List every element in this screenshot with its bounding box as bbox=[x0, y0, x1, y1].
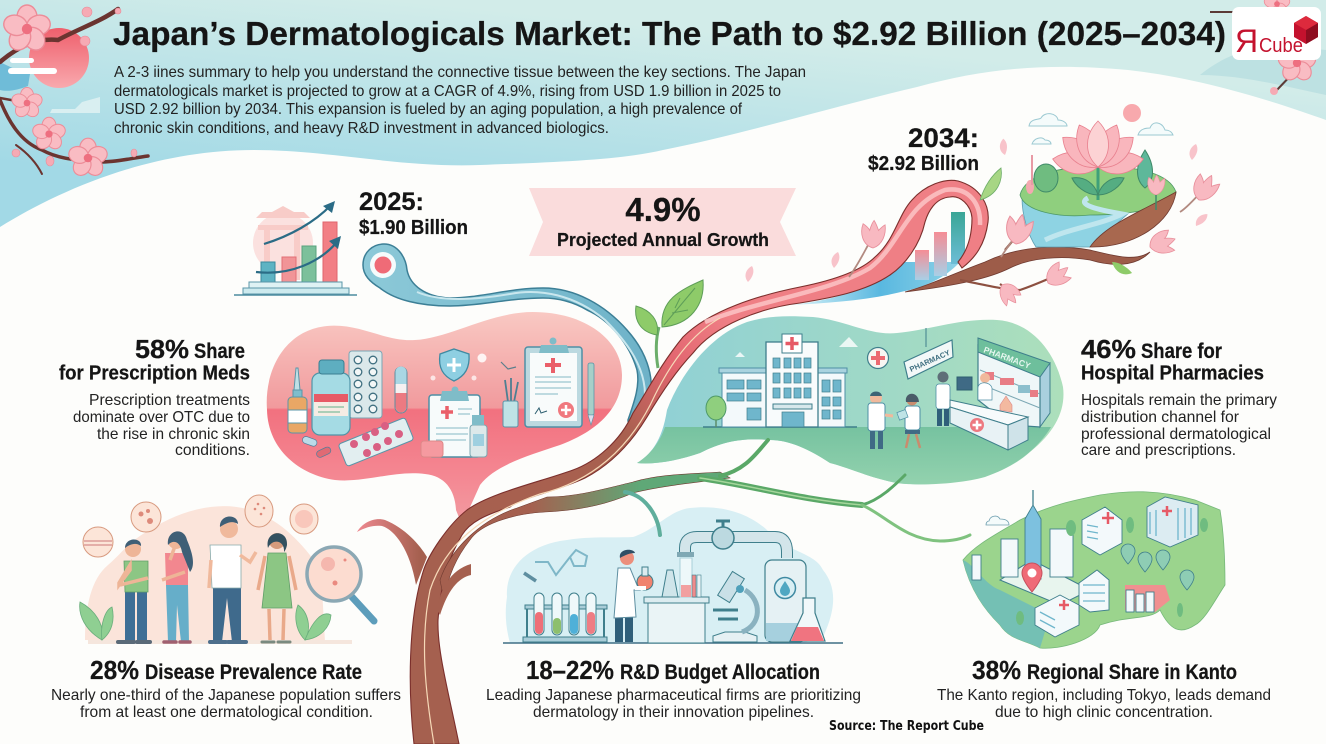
test tube rack bbox=[523, 593, 607, 642]
title: Japan’s Dermatologicals Market: The Path to $2.92 Billion (2025–2034) bbox=[113, 15, 1226, 52]
58% heading bbox=[59, 334, 250, 384]
trees bbox=[1016, 517, 1208, 625]
source note: Source: The Report Cube bbox=[829, 719, 984, 734]
hospital buildings bbox=[1035, 497, 1198, 637]
38% stat bbox=[937, 655, 1271, 721]
58% description: dominate over OTC due to bbox=[73, 409, 250, 426]
icon: Kanto map bbox=[963, 490, 1225, 648]
growth banner: 4.9% bbox=[625, 191, 701, 228]
icon: pharmacy counter and shelves bbox=[936, 338, 1050, 450]
summary text bbox=[114, 64, 806, 137]
logo: Я bbox=[1235, 23, 1258, 59]
molecule bbox=[524, 550, 587, 581]
person 4 bbox=[258, 533, 296, 642]
icon: hospital building bbox=[703, 334, 858, 427]
panel: pink prescription blob bbox=[267, 312, 622, 525]
icon: pharmacy hanging sign: PHARMACY bbox=[908, 348, 951, 374]
46% heading: 46% bbox=[1081, 334, 1136, 364]
summary text: A 2-3 iines summary to help you understand the connective tissue between the key sections. The Japan bbox=[114, 64, 806, 81]
growth bars 2034 bbox=[915, 212, 965, 280]
icon: pharmacy counter and shelves: PHARMACY bbox=[982, 344, 1032, 371]
summary text: USD 2.92 billion by 2034. This expansion is fueled by an aging population, a high prevalence of bbox=[114, 101, 743, 118]
scientist bbox=[614, 550, 653, 642]
58% description: the rise in chronic skin bbox=[97, 426, 250, 443]
2025 label: 2025: bbox=[359, 188, 424, 216]
46% description: Hospitals remain the primary bbox=[1081, 392, 1277, 409]
icon: clipboard large with pen bbox=[525, 338, 594, 427]
28% stat: 28% bbox=[90, 655, 139, 685]
icon: test tube bbox=[395, 367, 407, 413]
icon: laboratory scene bbox=[503, 521, 843, 643]
icon: doctors bbox=[868, 392, 920, 449]
tank bbox=[765, 560, 806, 642]
flask bbox=[790, 598, 825, 641]
map pins bbox=[1121, 544, 1194, 590]
summary text: dermatologicals market is projected to grow at a CAGR of 4.9%, rising from USD 1.9 billion in 2025 to bbox=[114, 83, 781, 100]
46% heading: Hospital Pharmacies bbox=[1081, 362, 1264, 384]
blue connector stem bbox=[363, 244, 651, 440]
pipe and valve bbox=[677, 521, 787, 558]
58% description: conditions. bbox=[175, 442, 250, 459]
icon: cherry blossom branch top left bbox=[0, 5, 148, 179]
58% heading: for Prescription Meds bbox=[59, 362, 250, 384]
icon: people group with skin concerns bbox=[80, 495, 374, 642]
28% stat: from at least one dermatological condition. bbox=[80, 704, 373, 721]
icon: buds and petals on branches bbox=[745, 138, 1222, 309]
city towers bbox=[972, 505, 1154, 612]
speech bubbles bbox=[83, 495, 318, 557]
18-22% stat: Leading Japanese pharmaceutical firms are prioritizing bbox=[486, 687, 861, 704]
panel: lab blob bbox=[506, 507, 833, 643]
2025 label bbox=[359, 188, 468, 239]
2034 label: $2.92 Billion bbox=[868, 153, 979, 175]
lab bench bbox=[644, 558, 709, 643]
2034 label bbox=[868, 123, 979, 175]
28% stat bbox=[51, 655, 401, 721]
icon: vial bbox=[288, 368, 307, 433]
38% stat: 38% bbox=[972, 655, 1021, 685]
icon: clipboard small bbox=[421, 386, 487, 457]
left twig with pink tip bbox=[357, 519, 427, 585]
46% heading bbox=[1081, 334, 1264, 384]
2025 label: $1.90 Billion bbox=[359, 217, 468, 239]
logo bbox=[1232, 7, 1321, 60]
growth banner: Projected Annual Growth bbox=[557, 229, 769, 250]
58% heading: 58% bbox=[135, 334, 189, 364]
growth banner bbox=[529, 188, 796, 256]
icon: lotus island bbox=[1020, 104, 1176, 247]
46% description bbox=[1081, 392, 1277, 459]
summary text: chronic skin conditions, and heavy R&D investment in advanced biologics. bbox=[114, 120, 609, 137]
28% stat: Disease Prevalence Rate bbox=[145, 661, 362, 684]
icon: cross badge bbox=[868, 348, 888, 368]
icon: capsules and flat blister bbox=[301, 417, 414, 467]
panel: green hospital blob bbox=[637, 316, 1063, 484]
18-22% stat: R&D Budget Allocation bbox=[620, 661, 820, 684]
58% heading: Share bbox=[194, 340, 245, 363]
panel: peach people blob bbox=[85, 506, 325, 642]
46% description: professional dermatological bbox=[1081, 426, 1271, 443]
icon: blister pack bbox=[349, 351, 382, 418]
46% description: distribution channel for bbox=[1081, 409, 1240, 426]
18-22% stat: 18–22% bbox=[526, 655, 614, 685]
2025 bar chart icon bbox=[234, 201, 357, 295]
28% stat: Nearly one-third of the Japanese population suffers bbox=[51, 687, 401, 704]
blue water under pink branch bbox=[790, 262, 960, 305]
46% description: care and prescriptions. bbox=[1081, 442, 1236, 459]
microscope bbox=[713, 571, 757, 642]
58% description bbox=[73, 392, 250, 459]
38% stat: due to high clinic concentration. bbox=[995, 704, 1213, 721]
right stub bbox=[437, 564, 471, 615]
18-22% stat bbox=[486, 655, 861, 721]
logo: Cube bbox=[1259, 35, 1303, 57]
38% stat: The Kanto region, including Tokyo, leads demand bbox=[937, 687, 1271, 704]
18-22% stat: dermatology in their innovation pipelines. bbox=[533, 704, 814, 721]
2034 label: 2034: bbox=[908, 123, 979, 153]
person 2 bbox=[162, 531, 193, 642]
tree: main trunk and pink branch bbox=[357, 180, 1150, 744]
icon: medicine bottle bbox=[312, 360, 350, 435]
person 3 bbox=[209, 516, 256, 642]
icon: shield bbox=[430, 349, 516, 381]
58% description: Prescription treatments bbox=[89, 392, 250, 409]
header wave background bbox=[0, 0, 1326, 227]
icon: leaves bbox=[80, 602, 331, 640]
icon: pen cup bbox=[503, 378, 518, 427]
sapling leaves bbox=[636, 280, 703, 368]
icon: pharmacy hanging sign bbox=[904, 328, 953, 379]
icon: cherry blossom top right bbox=[1200, 0, 1326, 95]
person 1 bbox=[118, 539, 150, 642]
46% heading: Share for bbox=[1141, 340, 1222, 363]
38% stat: Regional Share in Kanto bbox=[1027, 661, 1237, 684]
tree: green branches bbox=[625, 440, 970, 541]
magnifier bbox=[307, 547, 374, 621]
